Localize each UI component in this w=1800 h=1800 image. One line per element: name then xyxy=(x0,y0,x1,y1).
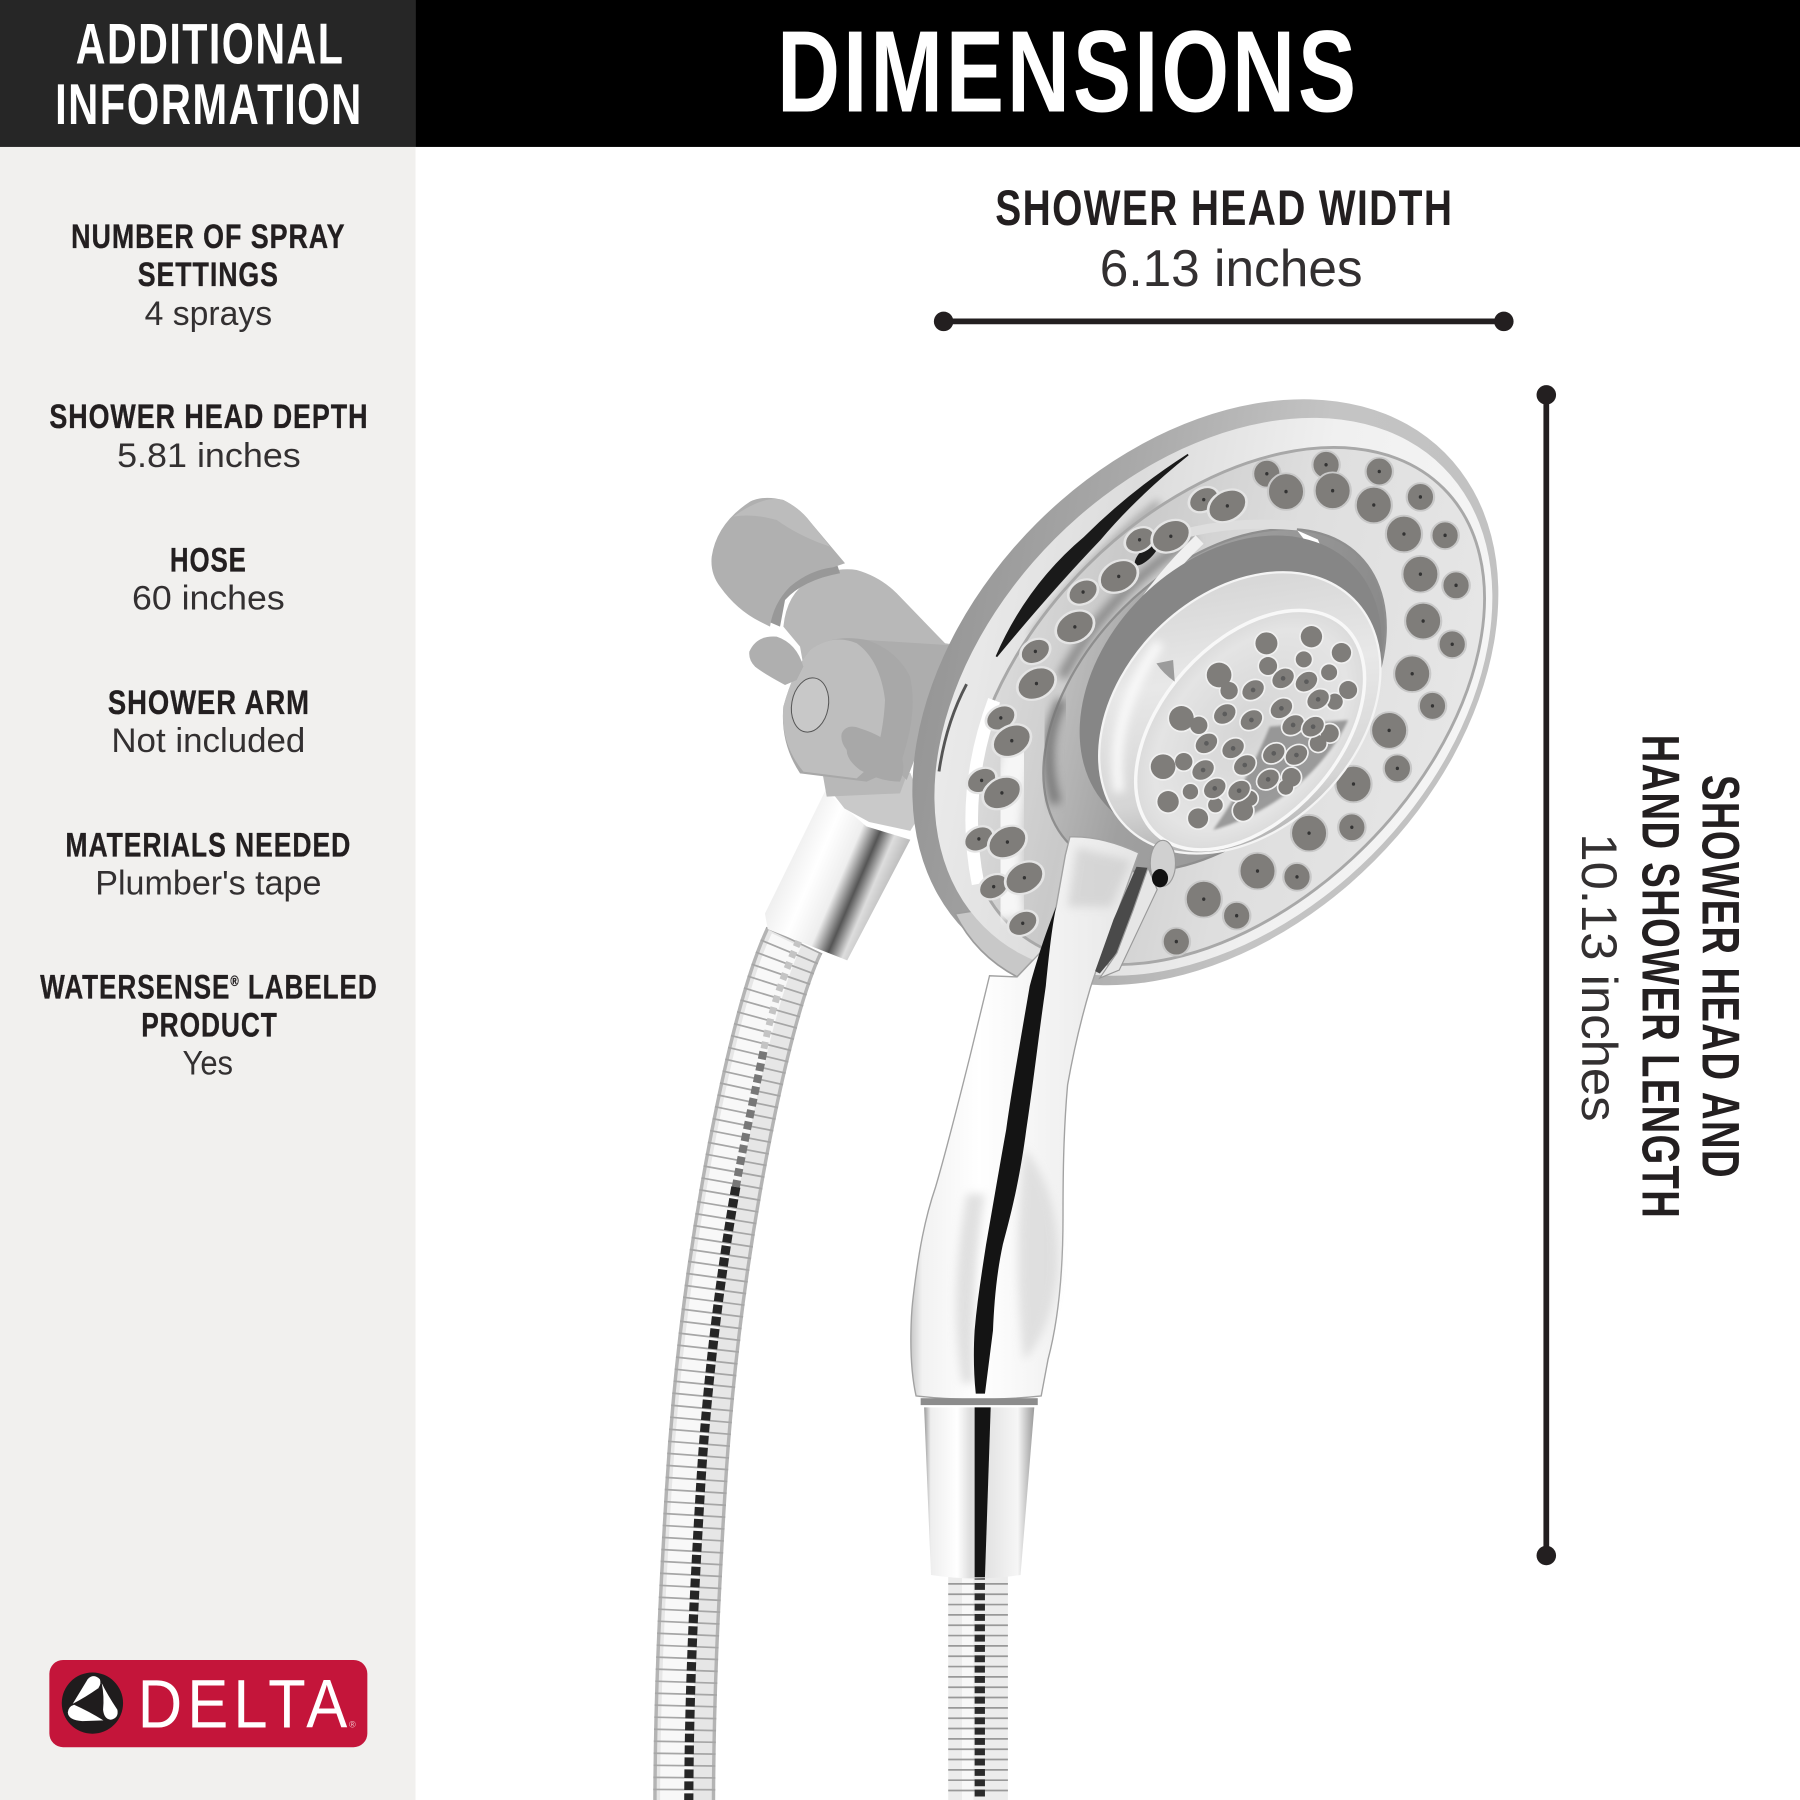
spec: watersense labeled product xyxy=(40,969,378,1082)
product: hand shower head xyxy=(1020,475,1442,909)
swivel arm body xyxy=(783,569,960,797)
connector neck xyxy=(768,563,840,627)
spec: number of spray settings: SETTINGS xyxy=(138,256,279,294)
chrome reflection on face xyxy=(1213,720,1348,830)
dimension: shower head and hand shower length xyxy=(1537,385,1749,1565)
lower wing xyxy=(841,727,903,782)
dark slot beside handle xyxy=(1095,867,1148,973)
spec: watersense labeled product: WATERSENSE xyxy=(40,969,291,1007)
spec: watersense labeled product: LABELED xyxy=(240,969,378,1007)
spec: shower arm: SHOWER ARM xyxy=(108,684,310,722)
product: hand shower handle xyxy=(911,837,1176,1399)
black reflection stripe xyxy=(974,907,1056,1394)
spec: hose xyxy=(132,542,285,618)
product: chrome hose sleeve xyxy=(765,773,924,960)
spec: shower head depth: SHOWER HEAD DEPTH xyxy=(49,398,368,436)
dimension: shower head width: SHOWER HEAD WIDTH xyxy=(995,179,1453,236)
lobed nozzle halos xyxy=(1151,626,1357,828)
spec: materials needed: Plumber's tape xyxy=(95,864,321,902)
dimension: shower head and hand shower length: SHOWER HEAD AND xyxy=(1690,775,1749,1179)
logo: delta xyxy=(49,1660,367,1747)
title: dimensions: DIMENSIONS xyxy=(777,6,1359,136)
header bar: additional information xyxy=(0,0,416,147)
heading: additional information: ADDITIONAL xyxy=(76,13,344,77)
spec: watersense labeled product: Yes xyxy=(183,1044,233,1082)
spec: watersense labeled product: ® xyxy=(230,973,240,990)
chrome strip xyxy=(1100,868,1157,978)
spec: hose: HOSE xyxy=(170,542,247,580)
header bar: dimensions xyxy=(416,0,1800,147)
spec: watersense labeled product: PRODUCT xyxy=(141,1007,278,1045)
product: hose collar xyxy=(921,1398,1038,1578)
swivel disc xyxy=(783,638,913,782)
logo: delta: DELTA xyxy=(138,1666,352,1743)
spec: number of spray settings xyxy=(71,218,346,333)
product: hand shower nozzles xyxy=(1151,626,1357,830)
dimension: shower head and hand shower length: 10.13 inches xyxy=(1571,833,1628,1122)
dimension: shower head width xyxy=(934,179,1514,331)
spec: shower head depth xyxy=(49,398,368,475)
product: ring spray nozzles xyxy=(958,451,1470,955)
spec: shower head depth: 5.81 inches xyxy=(117,437,301,475)
panel: sidebar background xyxy=(0,0,416,1800)
product: outer spray ring xyxy=(797,284,1614,1101)
threaded nut xyxy=(711,498,845,627)
logo: delta: ® xyxy=(349,1720,356,1730)
upper wing xyxy=(749,636,803,685)
spec: number of spray settings: 4 sprays xyxy=(145,295,272,333)
product: shower hoses xyxy=(676,940,1008,1800)
spec: shower arm: Not included xyxy=(111,722,305,760)
spec: number of spray settings: NUMBER OF SPRAY xyxy=(71,218,346,256)
lower ring tip xyxy=(955,907,1040,977)
chrome shading on ring band xyxy=(972,700,994,884)
lobed nozzle fills xyxy=(1151,626,1357,828)
button xyxy=(787,675,833,735)
dimension: shower head and hand shower length: HAND SHOWER LENGTH xyxy=(1631,735,1690,1219)
release tab xyxy=(1150,840,1176,886)
heading: additional information: INFORMATION xyxy=(55,73,363,137)
spec: hose: 60 inches xyxy=(132,580,285,618)
inner opening xyxy=(978,464,1451,936)
product: grey wall mount xyxy=(711,498,960,797)
dimension: shower head width: 6.13 inches xyxy=(1100,239,1363,297)
spec: shower arm xyxy=(108,684,310,760)
spec: materials needed xyxy=(65,826,351,902)
spec: materials needed: MATERIALS NEEDED xyxy=(65,826,351,864)
handle shading xyxy=(1068,847,1131,907)
